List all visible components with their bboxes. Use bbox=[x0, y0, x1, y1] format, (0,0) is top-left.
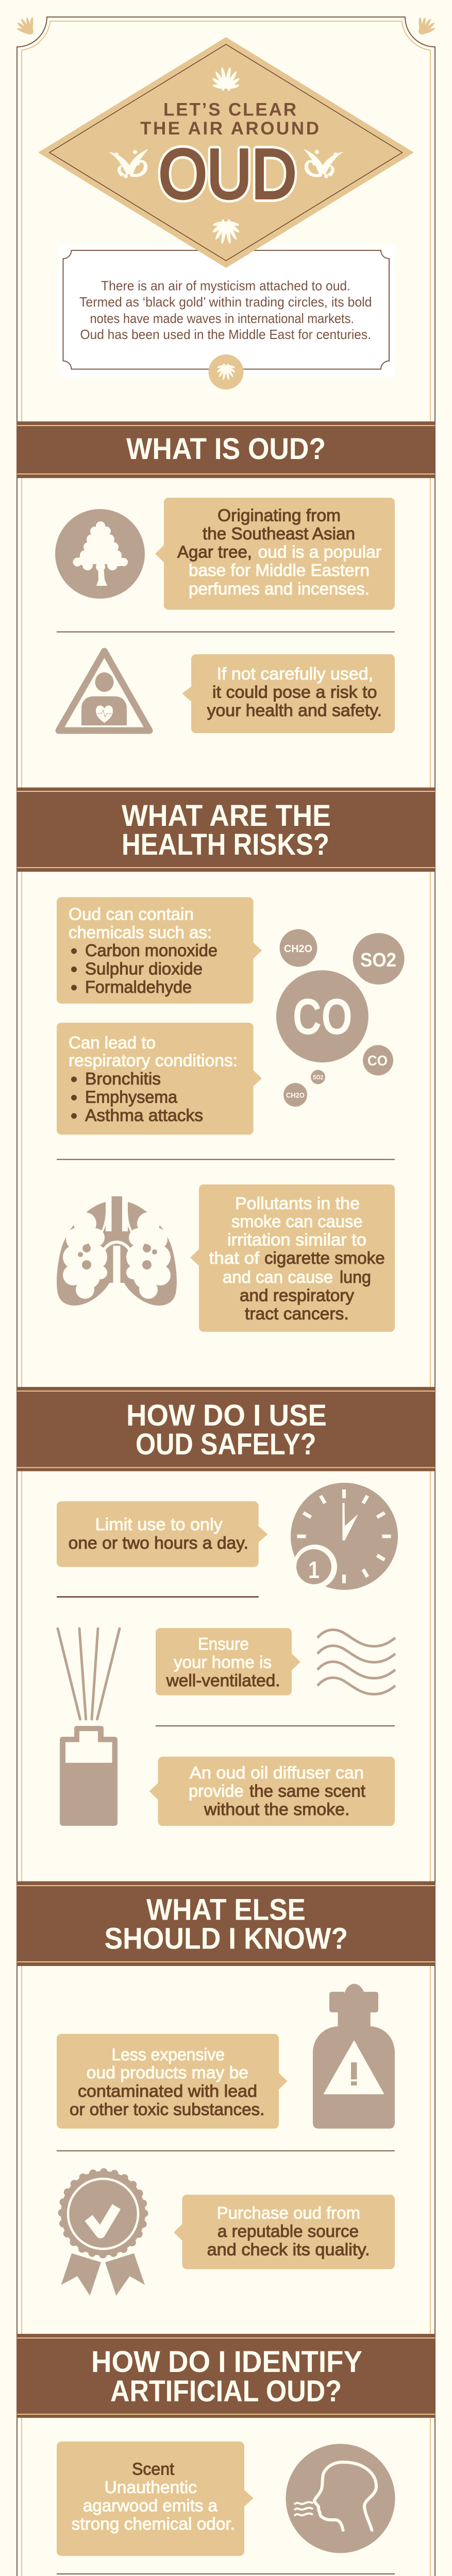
section header: identify artificial oud: ARTIFICIAL OUD? bbox=[110, 2375, 342, 2408]
callout: origin: base for Middle Eastern bbox=[189, 561, 370, 580]
callout: health risk: If not carefully used, bbox=[217, 664, 373, 683]
callout: origin: Originating from bbox=[217, 505, 341, 524]
section header: what is oud: WHAT IS OUD? bbox=[126, 432, 326, 466]
section header: health risks: HEALTH RISKS? bbox=[122, 828, 329, 861]
title diamond: OUD bbox=[159, 135, 296, 213]
callout: limit use bbox=[57, 1501, 268, 1567]
callout: conditions: Can lead to bbox=[69, 1033, 156, 1052]
callout: diffuser: provide bbox=[189, 1782, 244, 1800]
icon: toxic bottle bbox=[313, 1984, 395, 2129]
icon: clock bbox=[291, 1483, 398, 1590]
callout: health risk: your health and safety. bbox=[207, 701, 382, 720]
callout: origin: the Southeast Asian bbox=[203, 524, 355, 543]
callout: conditions: respiratory conditions: bbox=[69, 1051, 238, 1070]
callout: pollutants: and can cause bbox=[223, 1267, 333, 1286]
title diamond bbox=[38, 37, 414, 268]
callout: conditions: Bronchitis bbox=[85, 1069, 161, 1088]
callout: diffuser: the same scent bbox=[249, 1782, 365, 1800]
callout: conditions bbox=[57, 1023, 262, 1134]
callout: health risk bbox=[182, 654, 395, 733]
icon: gas molecules: CH2O bbox=[284, 943, 312, 955]
title diamond: LET’S CLEAR bbox=[163, 100, 296, 120]
icon: gas molecules: SO2 bbox=[360, 950, 396, 971]
icon: gas molecules: CO bbox=[293, 988, 353, 1045]
section header: what else: WHAT ELSE bbox=[146, 1893, 306, 1927]
section header: health risks bbox=[17, 787, 435, 872]
icon: gas molecules bbox=[276, 929, 405, 1107]
icon: gas molecules: SO2 bbox=[313, 1074, 323, 1081]
callout: contaminated products: contaminated with lead bbox=[78, 2081, 257, 2100]
callout: diffuser: without the smoke. bbox=[204, 1800, 349, 1819]
callout: pollutants: cigarette smoke bbox=[264, 1248, 385, 1267]
callout: pollutants: irritation similar to bbox=[227, 1230, 366, 1249]
callout: scent: Scent bbox=[132, 2459, 174, 2478]
callout: origin: Agar tree, bbox=[177, 543, 252, 562]
callout: pollutants: smoke can cause bbox=[231, 1212, 363, 1231]
callout: scent: Unauthentic bbox=[104, 2478, 197, 2497]
section header: what is oud bbox=[17, 421, 435, 478]
icon: lungs bbox=[57, 1196, 177, 1311]
callout: conditions: Asthma attacks bbox=[85, 1106, 203, 1125]
callout: pollutants: Pollutants in the bbox=[235, 1194, 360, 1213]
section header: use oud safely: OUD SAFELY? bbox=[136, 1428, 316, 1461]
intro panel: Oud has been used in the Middle East for centuries. bbox=[80, 327, 371, 342]
icon: air waves bbox=[317, 1630, 395, 1694]
callout: origin: oud is a popular bbox=[258, 543, 381, 562]
icon: gas molecules: CO bbox=[367, 1053, 388, 1069]
intro panel: notes have made waves in international markets. bbox=[90, 311, 354, 326]
callout: chemicals: Sulphur dioxide bbox=[85, 959, 203, 978]
callout: contaminated products: or other toxic substances. bbox=[70, 2100, 264, 2119]
callout: ventilation: Ensure bbox=[198, 1634, 249, 1653]
callout: chemicals: chemicals such as: bbox=[69, 923, 212, 942]
callout: chemicals bbox=[57, 897, 262, 1004]
callout: pollutants: tract cancers. bbox=[245, 1304, 349, 1323]
intro panel bbox=[58, 245, 395, 389]
icon: quality badge bbox=[60, 2170, 146, 2296]
callout: scent bbox=[57, 2442, 254, 2556]
callout: reputable source bbox=[174, 2195, 395, 2269]
section header: what else: SHOULD I KNOW? bbox=[104, 1922, 348, 1956]
callout: reputable source: Purchase oud from bbox=[217, 2203, 360, 2222]
icon: warning person bbox=[59, 651, 149, 731]
callout: contaminated products: oud products may be bbox=[87, 2063, 248, 2082]
callout: contaminated products: Less expensive bbox=[111, 2045, 225, 2064]
section header: what else bbox=[17, 1882, 435, 1966]
callout: reputable source: and check its quality. bbox=[207, 2240, 370, 2259]
panel: identify artificial oud bbox=[53, 2442, 395, 2576]
callout: reputable source: a reputable source bbox=[217, 2222, 359, 2241]
callout: chemicals: Formaldehyde bbox=[85, 977, 192, 996]
callout: pollutants: that of bbox=[209, 1248, 260, 1267]
section header: identify artificial oud bbox=[17, 2334, 435, 2418]
section header: use oud safely: HOW DO I USE bbox=[126, 1399, 327, 1432]
callout: diffuser bbox=[149, 1757, 395, 1826]
callout: ventilation: well-ventilated. bbox=[166, 1671, 280, 1690]
title diamond: OUD bbox=[159, 135, 296, 213]
icon: head smelling bbox=[286, 2444, 395, 2553]
icon: gas molecules: CH2O bbox=[286, 1091, 305, 1099]
callout: conditions: Emphysema bbox=[85, 1088, 178, 1107]
callout: health risk: it could pose a risk to bbox=[212, 683, 377, 702]
callout: origin: perfumes and incenses. bbox=[189, 579, 370, 598]
icon: reed diffuser bbox=[58, 1629, 120, 1826]
section header: use oud safely bbox=[17, 1387, 435, 1471]
title diamond: THE AIR AROUND bbox=[140, 118, 319, 139]
callout: chemicals: Oud can contain bbox=[69, 905, 194, 924]
panel: what else bbox=[57, 1984, 395, 2296]
panel: health risks bbox=[57, 897, 405, 1332]
callout: contaminated products bbox=[57, 2034, 288, 2129]
icon: clock: 1 bbox=[308, 1556, 320, 1583]
section header: health risks: WHAT ARE THE bbox=[122, 799, 331, 833]
callout: chemicals: Carbon monoxide bbox=[85, 941, 217, 960]
intro panel: There is an air of mysticism attached to oud. bbox=[101, 278, 350, 294]
callout: pollutants: lung bbox=[340, 1267, 371, 1286]
callout: ventilation: your home is bbox=[174, 1653, 272, 1672]
callout: scent: strong chemical odor. bbox=[72, 2514, 235, 2533]
intro panel: Termed as ‘black gold’ within trading circles, its bold bbox=[79, 294, 372, 310]
callout: pollutants bbox=[190, 1184, 395, 1332]
section header: identify artificial oud: HOW DO I IDENTIFY bbox=[91, 2345, 362, 2379]
callout: limit use: Limit use to only bbox=[95, 1515, 223, 1534]
icon: tree bbox=[55, 509, 145, 599]
panel: what is oud bbox=[55, 498, 395, 733]
callout: limit use: one or two hours a day. bbox=[69, 1533, 248, 1552]
callout: scent: agarwood emits a bbox=[83, 2496, 218, 2515]
callout: diffuser: An oud oil diffuser can bbox=[190, 1763, 364, 1782]
callout: ventilation bbox=[156, 1628, 300, 1696]
callout: pollutants: and respiratory bbox=[240, 1286, 355, 1304]
callout: origin bbox=[155, 498, 395, 610]
panel: use oud safely bbox=[57, 1483, 398, 1826]
